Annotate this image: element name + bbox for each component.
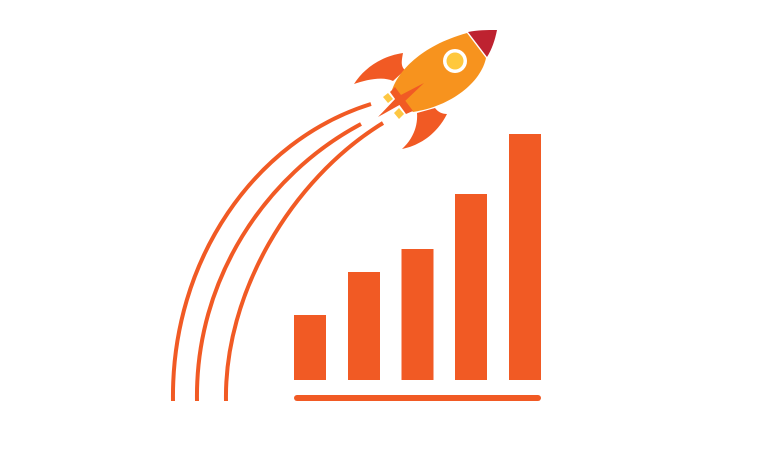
upper fin	[354, 53, 405, 84]
window	[443, 49, 467, 73]
nozzle band	[390, 87, 413, 114]
exhaust square	[383, 93, 393, 103]
rocket body	[392, 33, 486, 112]
rocket	[354, 30, 497, 149]
exhaust square	[394, 108, 404, 119]
lower fin	[402, 108, 447, 149]
bar chart	[294, 134, 541, 401]
flame	[378, 83, 424, 117]
rocket exhaust trails	[173, 104, 383, 401]
nose cone	[468, 30, 497, 57]
